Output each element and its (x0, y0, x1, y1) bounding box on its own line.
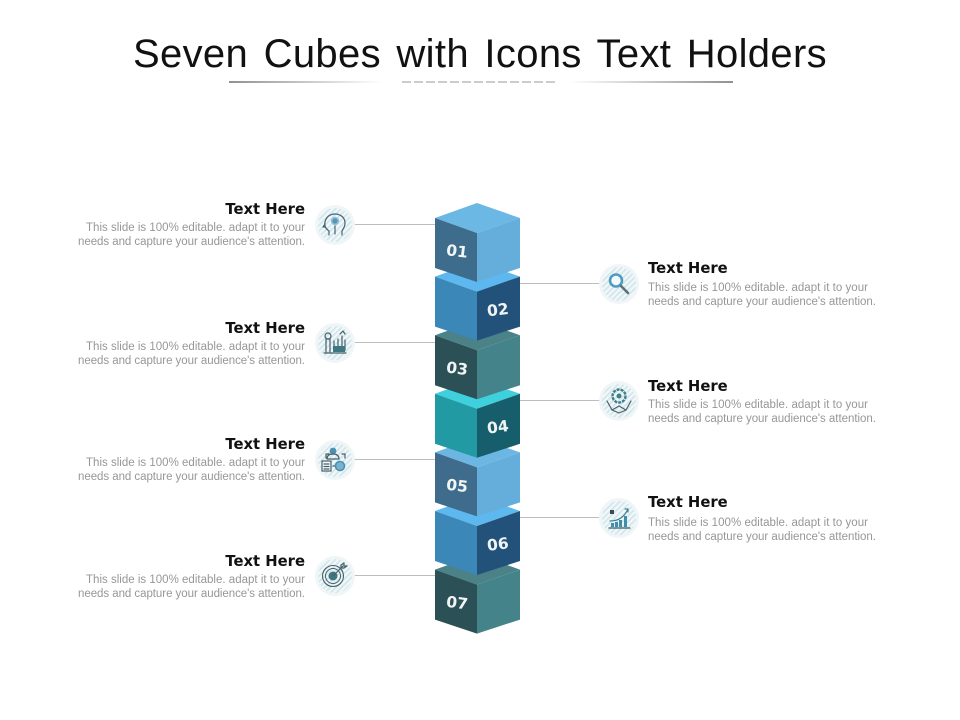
icon: magnifier (599, 264, 639, 304)
connector lines (354, 224, 600, 576)
text block: left 3: needs and capture your audience's attention. (78, 471, 305, 483)
cube 06 (435, 496, 520, 575)
cube 02 (435, 262, 520, 341)
cube 04: 04 (486, 417, 510, 438)
cube 04 (435, 379, 520, 458)
cube 03: 03 (445, 358, 469, 379)
text block: right 1: needs and capture your audience's attention. (648, 296, 876, 308)
text block: left 1: Text Here (225, 201, 305, 218)
text block: left 1: needs and capture your audience's attention. (78, 236, 305, 248)
text block: left 1 (78, 201, 305, 248)
text block: right 3: This slide is 100% editable. adapt it to your (648, 517, 868, 529)
text block: left 4: This slide is 100% editable. adapt it to your (86, 574, 305, 586)
text block: right 3: needs and capture your audience's attention. (648, 531, 876, 543)
text block: left 4: needs and capture your audience's attention. (78, 588, 305, 600)
icon: gear over handshake (599, 381, 639, 421)
text block: right 3 (648, 494, 876, 543)
text block: left 2: Text Here (225, 320, 305, 337)
text block: left 1: This slide is 100% editable. adapt it to your (86, 222, 305, 234)
text block: left 4: Text Here (225, 553, 305, 570)
title underline (229, 82, 733, 83)
text block: left 2: needs and capture your audience's attention. (78, 355, 305, 367)
text block: right 3: Text Here (648, 494, 728, 511)
icon: target with arrow (315, 556, 355, 596)
text block: left 3 (78, 436, 305, 483)
text block: right 2 (648, 378, 876, 425)
cube 01: 01 (445, 241, 469, 262)
title: Seven Cubes with Icons Text Holders (133, 32, 827, 76)
text block: right 1: This slide is 100% editable. adapt it to your (648, 282, 868, 294)
text block: right 2: Text Here (648, 378, 728, 395)
icon: growth chart (599, 498, 639, 538)
icon: head with light bulb (315, 205, 355, 245)
text block: left 4 (78, 553, 305, 600)
text block: left 2: This slide is 100% editable. adapt it to your (86, 341, 305, 353)
cube 01 (435, 203, 520, 282)
text block: left 3: Text Here (225, 436, 305, 453)
icon: process flow with gear (315, 440, 355, 480)
text block: right 1: Text Here (648, 260, 728, 277)
icon: chart and people (315, 323, 355, 363)
cube 05: 05 (445, 476, 469, 496)
text block: right 2: needs and capture your audience's attention. (648, 413, 876, 425)
cube 05 (435, 437, 520, 516)
text block: left 2 (78, 320, 305, 367)
cube 07 (435, 555, 520, 634)
text block: right 1 (648, 260, 876, 308)
cube 06: 06 (486, 534, 510, 555)
cube 03 (435, 320, 520, 399)
cube 07: 07 (445, 593, 469, 613)
text block: right 2: This slide is 100% editable. adapt it to your (648, 399, 868, 411)
cube 02: 02 (486, 300, 510, 320)
text block: left 3: This slide is 100% editable. adapt it to your (86, 457, 305, 469)
